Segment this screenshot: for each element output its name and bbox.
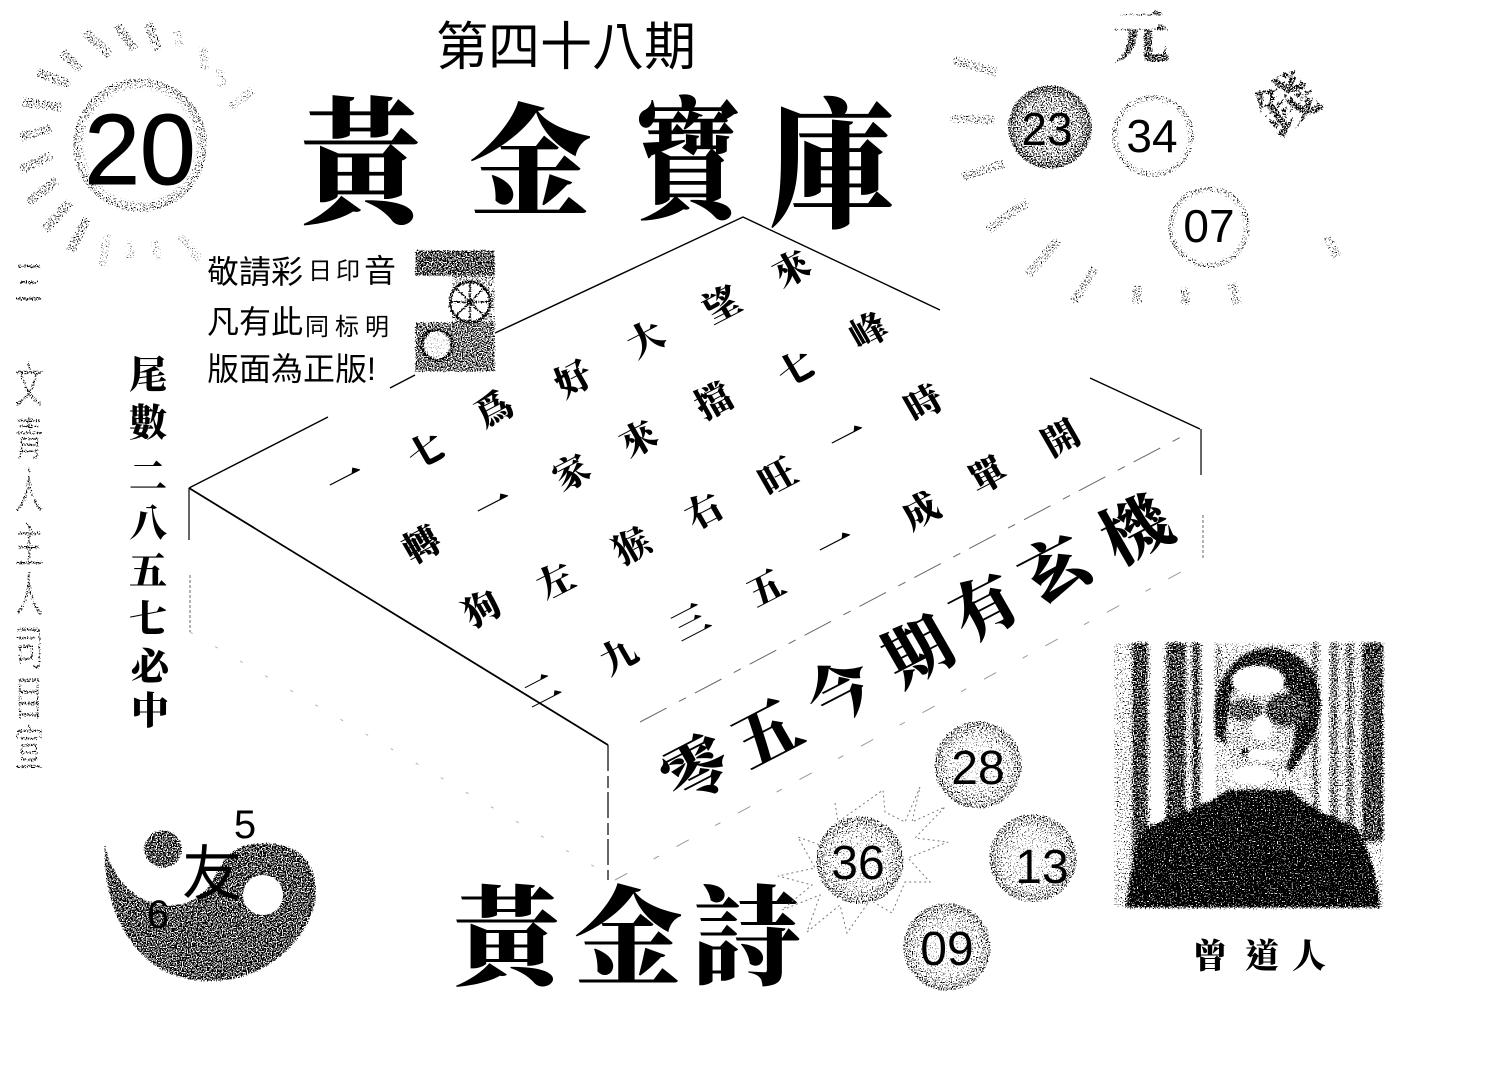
issue heading: 第四十八期 [436, 19, 696, 77]
notice text: 日 [308, 258, 332, 285]
bottom title: 金 [574, 881, 682, 1000]
ball 09: 09 [920, 923, 974, 976]
vertical tail-digit text: 五 [129, 540, 167, 595]
forehead highlight [1232, 666, 1284, 694]
faint vertical side text: 司 [14, 611, 44, 679]
grid row 3: 猴 [602, 512, 662, 575]
notice text: 印 [336, 258, 360, 285]
main title: 金 [469, 98, 591, 233]
sunglasses [1227, 699, 1263, 721]
faded rotated character: 錢 [1246, 61, 1331, 148]
grid row 2: 七 [766, 336, 824, 398]
grid row 4 [512, 405, 1089, 720]
notice text: 明 [365, 314, 389, 341]
ball 07: 07 [1183, 200, 1235, 252]
grid row 3: 右 [674, 478, 732, 540]
top-right sunburst with numbers [950, 6, 1337, 305]
portrait caption: 道 [1245, 938, 1279, 976]
yin-yang symbol [104, 803, 316, 981]
notice text: 敬請彩 [207, 254, 303, 290]
ball 13 [989, 814, 1077, 902]
faint vertical side text: 三 [14, 246, 44, 314]
yin-yang symbol: 6 [147, 893, 169, 937]
portrait caption [1193, 938, 1326, 976]
portrait caption: 人 [1292, 939, 1326, 976]
vertical tail-digit text: 二 [129, 446, 167, 501]
grid row 3: 左 [526, 548, 584, 610]
grid row 4: 三 [661, 590, 719, 652]
starburst behind ball 36 [778, 787, 948, 933]
grid row 4: 五 [736, 555, 794, 617]
box side text: 零 [641, 709, 747, 822]
portrait photo [1113, 642, 1384, 908]
ball 07 [1168, 186, 1250, 268]
faint vertical side text: 文 [14, 348, 44, 416]
yin-yang symbol: 友 [182, 841, 242, 908]
box side text: 機 [1081, 468, 1189, 582]
grid row 1: 爲 [464, 376, 522, 438]
notice text: 版面為正版! [207, 351, 376, 387]
ball 13: 13 [1015, 841, 1069, 894]
notice text: 标 [335, 314, 359, 341]
decorative stamp [415, 250, 495, 372]
ball 36 [816, 816, 904, 904]
main title: 庫 [769, 91, 895, 246]
ball 28 [934, 721, 1022, 809]
box side text: 期 [863, 591, 969, 704]
hair [1214, 648, 1321, 772]
vertical tail-digit text: 數 [129, 392, 167, 447]
box side text: 玄 [999, 506, 1110, 622]
grid row 4: 開 [1031, 405, 1089, 467]
grid row 1: 來 [762, 236, 820, 298]
yin-yang symbol: 5 [234, 803, 256, 847]
faint vertical side text: 人 [14, 454, 44, 522]
grid row 4: 一 [806, 511, 864, 573]
grid row 3: 旺 [748, 444, 806, 506]
faint vertical side text: 人 [14, 558, 44, 626]
main title [299, 90, 895, 246]
chin highlight [1234, 766, 1274, 784]
main title: 黃 [299, 92, 441, 243]
grid row 3: 一 [818, 404, 876, 466]
smile [1246, 750, 1280, 760]
grid row 2: 家 [542, 440, 600, 502]
grid row 2: 峰 [839, 298, 897, 360]
grid row 4: 二 [512, 658, 570, 720]
grid row 2: 來 [609, 406, 667, 468]
face [1225, 676, 1295, 790]
vertical tail-digit text: 必 [131, 636, 173, 691]
grid row 2 [392, 298, 897, 574]
grid row 4: 成 [891, 478, 949, 540]
grid row 2: 擋 [684, 368, 742, 430]
notice text: 同 [305, 314, 329, 341]
ball 34: 34 [1126, 110, 1178, 162]
isometric box outline [189, 217, 1203, 880]
ball 09 [903, 903, 991, 991]
faded character: 元 [1112, 6, 1170, 71]
box side text: 五 [711, 673, 817, 786]
grid row 4: 單 [958, 442, 1016, 504]
box side text: 今 [785, 631, 891, 744]
jacket [1126, 790, 1380, 908]
faint vertical side text: 目 [14, 662, 44, 730]
box side text [641, 468, 1189, 822]
grid row 1: 一 [316, 446, 374, 508]
vertical tail-digit text: 中 [131, 680, 169, 735]
sunburst badge: number 20 [20, 23, 253, 267]
vertical tail-digit text: 八 [129, 492, 167, 547]
grid row 1: 好 [544, 346, 602, 408]
faint vertical side text: 宣 [14, 711, 44, 779]
vertical tail-digit text [129, 344, 173, 735]
vertical tail-digit text: 七 [129, 588, 167, 643]
grid row 3: 狗 [452, 576, 510, 638]
bottom title [452, 881, 801, 1000]
grid row 1: 大 [616, 306, 674, 368]
grid row 3 [452, 370, 952, 638]
notice text [207, 253, 396, 387]
portrait caption: 曾 [1193, 938, 1227, 976]
grid row 4: 九 [589, 623, 647, 685]
top face character grid [316, 236, 1089, 720]
bottom title: 詩 [693, 881, 801, 1000]
curtain background [1113, 642, 1384, 908]
ball 23 [1008, 85, 1092, 169]
ball 23: 23 [1021, 103, 1073, 155]
grid row 2: 一 [464, 472, 522, 534]
notice text: 凡有此 [207, 304, 303, 340]
nose [1253, 716, 1271, 740]
faint vertical side text: 青 [14, 402, 44, 470]
ball 36: 36 [831, 837, 885, 890]
faint vertical side text: 主 [14, 508, 44, 576]
faint vertical side text [14, 246, 44, 779]
box side text: 有 [929, 547, 1035, 660]
ball 28: 28 [951, 742, 1005, 795]
bottom title: 黃 [452, 881, 578, 1000]
main title: 寶 [636, 90, 747, 237]
grid row 3: 時 [894, 370, 952, 432]
grid row 1 [316, 236, 820, 508]
grid row 2: 轉 [392, 512, 450, 574]
sunburst badge: number 20: 20 [84, 94, 196, 206]
grid row 1: 七 [396, 418, 454, 480]
notice text: 音 [364, 253, 396, 289]
grid row 1: 望 [692, 272, 750, 334]
ball 34 [1112, 95, 1194, 177]
vertical tail-digit text: 尾 [129, 344, 167, 399]
faded rays [950, 60, 1337, 305]
